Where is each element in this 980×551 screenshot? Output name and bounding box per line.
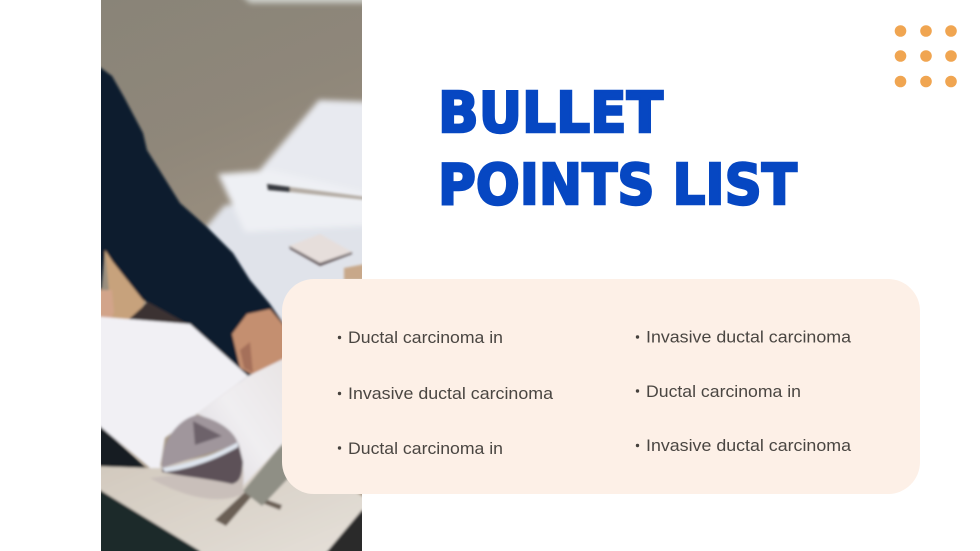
- right column bullets: Invasive ductal carcinoma: [646, 328, 852, 346]
- right column bullets: Ductal carcinoma in: [646, 382, 801, 401]
- right column bullets: Invasive ductal carcinoma: [646, 436, 852, 455]
- left column bullets: Ductal carcinoma in: [348, 328, 503, 347]
- photo: hands turning pages of a document: [90, 0, 375, 551]
- left column bullets: Ductal carcinoma in: [348, 439, 503, 458]
- title: BULLET: [438, 81, 663, 146]
- title: [438, 81, 797, 218]
- title: POINTS LIST: [438, 153, 797, 218]
- left column bullets: [338, 328, 554, 458]
- decorative dot grid icon: [895, 25, 957, 87]
- right column bullets: [636, 328, 852, 455]
- left column bullets: Invasive ductal carcinoma: [348, 384, 554, 403]
- panel: bullet list: [282, 279, 920, 494]
